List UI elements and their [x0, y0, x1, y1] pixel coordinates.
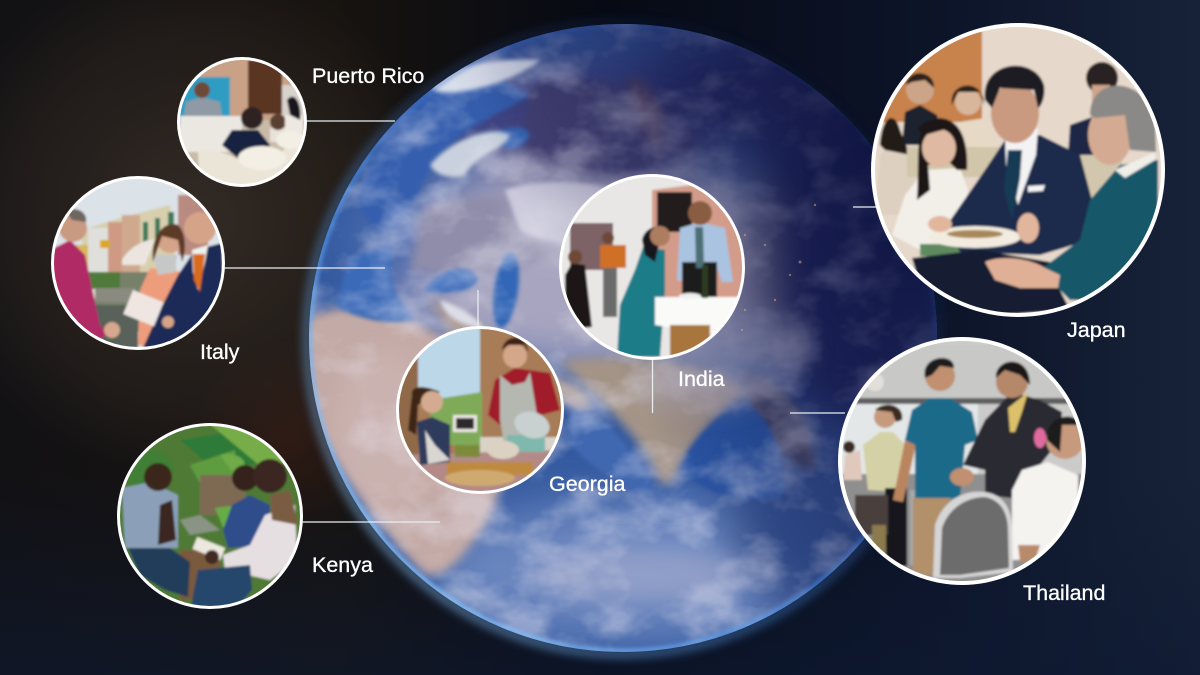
photo: Kenya: [115, 420, 305, 610]
globe: [300, 20, 950, 660]
cloud texture: [300, 20, 950, 660]
label: Georgia: Georgia: [549, 472, 626, 496]
label: Kenya: Kenya: [312, 553, 373, 577]
photo: Japan: [870, 23, 1165, 320]
connector lines: [222, 121, 876, 522]
seas: [336, 62, 785, 499]
land masses: [300, 75, 815, 575]
photo: Georgia: [395, 325, 565, 495]
city lights: [740, 204, 816, 332]
photo: Italy: [50, 175, 230, 355]
photo: Thailand: [838, 337, 1086, 586]
atmosphere glow: [307, 22, 939, 654]
photo: Puerto Rico: [175, 55, 312, 190]
ice and snow: [428, 56, 606, 327]
label: Japan: Japan: [1067, 318, 1126, 342]
label: Thailand: Thailand: [1023, 581, 1105, 605]
inner limb: [310, 25, 936, 651]
label: Puerto Rico: Puerto Rico: [312, 64, 424, 88]
label: India: India: [678, 367, 725, 391]
photo: India: [559, 174, 745, 360]
large colour zones: [345, 35, 945, 640]
label: Italy: Italy: [200, 340, 240, 364]
night side shading: [464, 24, 937, 600]
